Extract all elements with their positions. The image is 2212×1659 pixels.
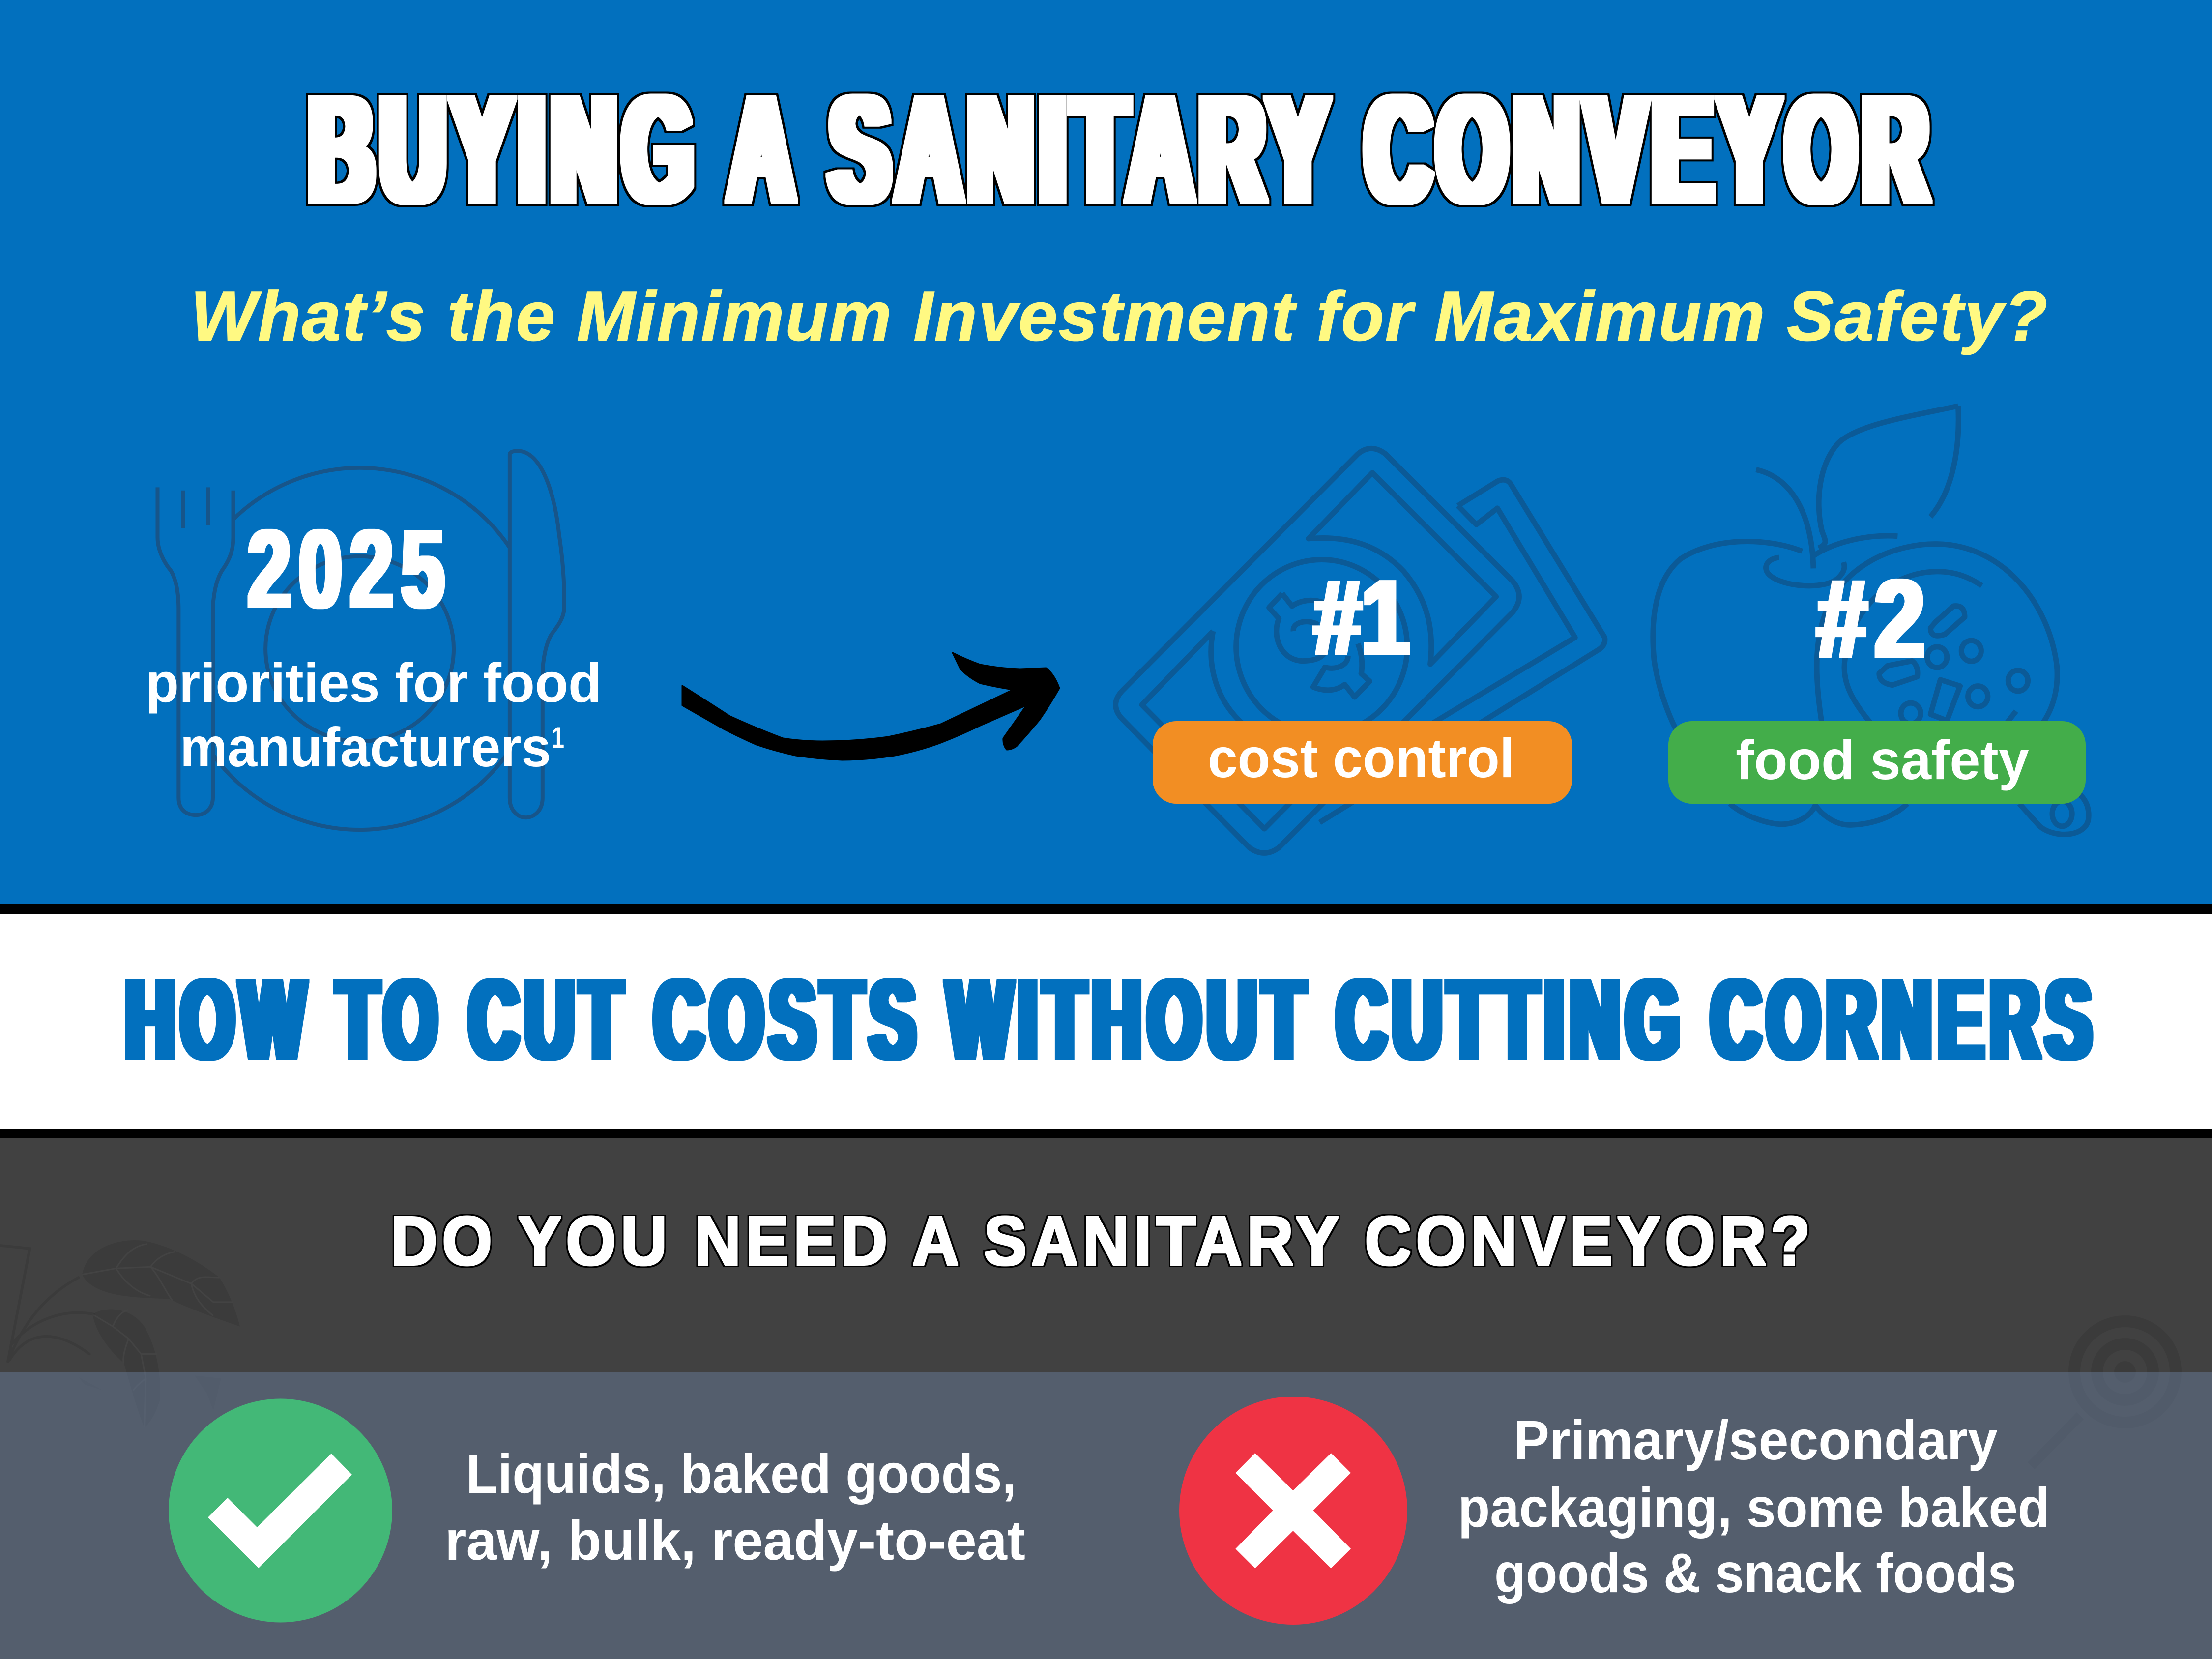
text block: unsuitable products: packaging, some baked — [1458, 1477, 2050, 1539]
icon: wheat watermark — [0, 1240, 240, 1427]
panel: white heading band — [0, 904, 2212, 1138]
panel: slate answer band — [0, 1372, 2212, 1659]
year stat: 2025: 2025 — [248, 507, 444, 631]
subtitle: What’s the Minimum Investment for Maximum Safety? — [191, 277, 2047, 355]
heading: how to cut costs: HOW TO CUT COSTS WITHOUT CUTTING CORNERS — [125, 957, 2091, 1083]
title: BUYING A SANITARY CONVEYOR — [309, 64, 1927, 234]
icon: target watermark — [2031, 1321, 2176, 1466]
icon: apple — [1653, 406, 2089, 834]
text block: suitable products: Liquids, baked goods, — [466, 1443, 1017, 1505]
icon: green check — [169, 1399, 392, 1622]
rank: #2: #2 — [1817, 557, 1925, 680]
text block: unsuitable products — [1458, 1409, 2050, 1604]
text block: priorities for food manufacturers — [146, 652, 602, 778]
text block: suitable products — [445, 1443, 1025, 1572]
text block: priorities for food manufacturers: manufacturers — [180, 716, 551, 778]
text block: unsuitable products: goods & snack foods — [1494, 1542, 2016, 1604]
panel: blue header background — [0, 0, 2212, 904]
text block: priorities for food manufacturers: 1 — [552, 721, 564, 754]
rank: #1: #1 — [1313, 558, 1409, 676]
text block: suitable products: raw, bulk, ready-to-eat — [445, 1510, 1025, 1572]
icon: red cross — [1179, 1397, 1407, 1625]
pill: food safety: food safety — [1736, 729, 2029, 791]
pill: cost control — [1153, 721, 1572, 804]
icon: plate and cutlery — [158, 451, 564, 830]
arrow — [682, 653, 1059, 760]
text block: priorities for food manufacturers: priorities for food — [146, 652, 602, 714]
icon: money bills — [1116, 448, 1605, 853]
heading: do you need a sanitary conveyor: DO YOU NEED A SANITARY CONVEYOR? — [391, 1202, 1810, 1280]
pill: cost control: cost control — [1208, 727, 1514, 789]
pill: food safety — [1668, 721, 2086, 804]
panel: dark question band — [0, 1138, 2212, 1659]
text block: unsuitable products: Primary/secondary — [1513, 1409, 1998, 1471]
